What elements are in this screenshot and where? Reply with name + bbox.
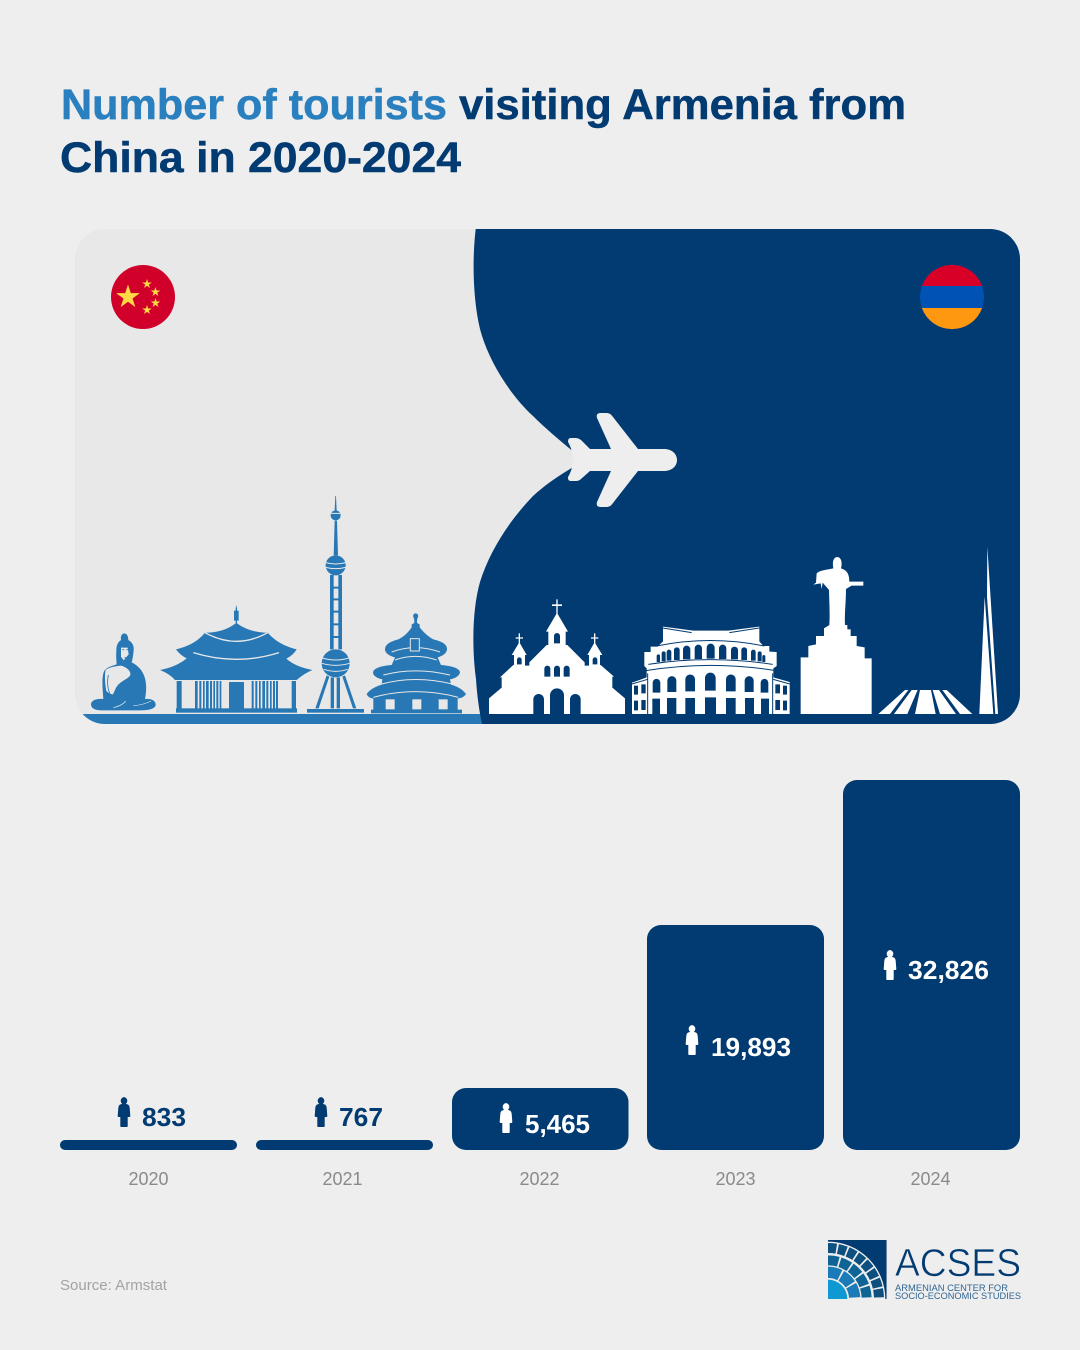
icon: Armenia flag [920,265,984,329]
panel: blue ground strip [80,714,490,724]
panel: Armenia side background [473,229,1020,724]
bar: 2022: 2022 [519,1169,560,1189]
title: Number of tourists [61,81,447,129]
bar: 2023 [647,925,824,1189]
bar: 2022 [452,1088,628,1189]
source note: Source: Armstat [60,1277,168,1294]
bar: 2020: 2020 [128,1169,169,1189]
bar: 2021: 2021 [322,1169,363,1189]
bar: 2023: 2023 [715,1169,756,1189]
bar: 2021: 767 [339,1102,383,1132]
icon: pagoda [160,605,312,713]
icon: church [489,599,625,714]
icon: Temple of Heaven [367,613,466,713]
icon: China flag [111,265,175,329]
title: visiting Armenia from [459,81,906,129]
icon: Armenia landmarks left [489,599,790,714]
bar chart [60,780,1020,1189]
bar: 2023: 19,893 [711,1032,791,1062]
icon: seated Buddha [91,633,156,710]
bar: 2020 [60,1097,237,1189]
title: China in 2020-2024 [60,134,461,182]
logo: ACSES: SOCIO-ECONOMIC STUDIES [895,1291,1021,1302]
icon: Armenia landmarks right [801,547,998,714]
bar: 2021 [256,1097,433,1189]
logo: ACSES: ARMENIAN CENTER FOR [895,1283,1008,1294]
logo: ACSES [828,1240,1021,1299]
icon: opera house [632,627,790,714]
bar: 2024 [843,780,1020,1189]
title [60,81,906,182]
bar: 2024: 32,826 [908,955,989,985]
icon: airplane [568,413,677,507]
icon: Oriental Pearl tower [307,496,364,713]
bar: 2020: 833 [142,1102,186,1132]
panel: journey illustration [75,229,1020,724]
panel: China side background [75,229,595,724]
bar: 2024: 2024 [910,1169,951,1189]
logo: ACSES: ACSES [895,1242,1021,1285]
bar: 2022: 5,465 [525,1109,590,1139]
icon: ACSES emblem [828,1240,887,1299]
icon: Mother Armenia statue [801,557,872,714]
icon: memorial steps [878,690,972,714]
icon: China landmarks [91,496,466,713]
icon: memorial spire [979,547,998,714]
